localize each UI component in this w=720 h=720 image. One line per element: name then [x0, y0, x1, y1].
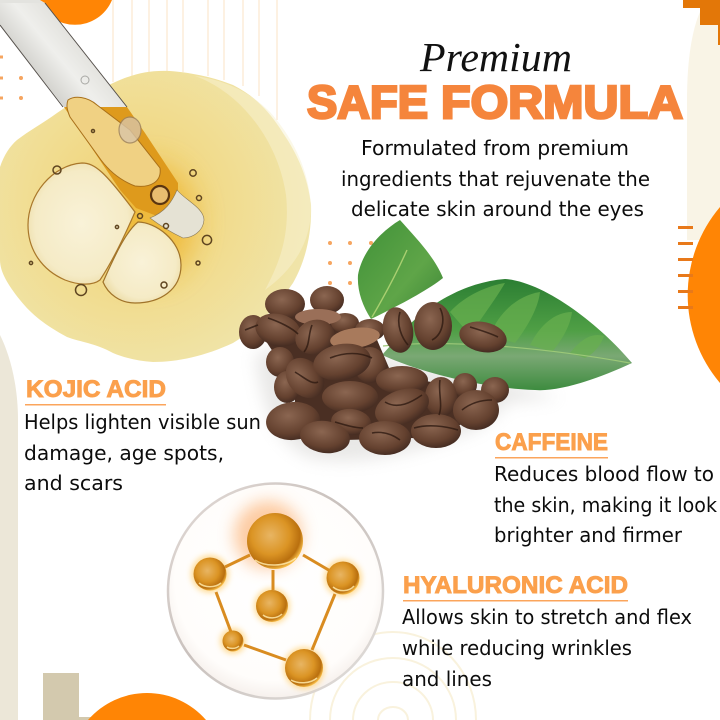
dropper dark edge	[0, 3, 127, 107]
beans	[239, 286, 510, 456]
bean shadow	[255, 340, 560, 461]
large bubble	[28, 163, 135, 284]
heading: Hyaluronic Acid: HYALURONIC ACID	[403, 572, 628, 599]
oil serum illustration	[0, 0, 311, 362]
small bubble	[103, 222, 181, 303]
text: Caffeine: Reduces blood flow to	[494, 462, 714, 486]
amber glow	[104, 164, 196, 280]
title: SAFE FORMULA	[307, 76, 683, 128]
bottom concentric rings	[310, 632, 476, 720]
left cream column	[0, 335, 18, 720]
heading: Caffeine: CAFFEINE	[495, 429, 608, 456]
text: Kojic Acid	[24, 410, 261, 495]
molecule illustration	[168, 484, 383, 698]
text: Hyaluronic Acid	[402, 605, 692, 691]
text: Kojic Acid: Helps lighten visible sun	[24, 410, 261, 434]
intro text: Formulated from premium	[361, 136, 629, 160]
glass dish	[168, 484, 383, 698]
title: Premium: Premium	[419, 34, 572, 80]
bottom orange circle	[88, 693, 206, 720]
leaf stripes	[450, 283, 604, 358]
puddle highlight	[195, 76, 311, 290]
air bubble rings	[29, 130, 212, 296]
text: Hyaluronic Acid: while reducing wrinkles	[402, 636, 632, 660]
text: Kojic Acid: and scars	[24, 471, 123, 495]
atoms	[194, 513, 360, 687]
top right stepped orange block	[683, 0, 720, 45]
dark bean underlay	[262, 312, 485, 440]
amber oil in dropper	[64, 107, 178, 224]
middle dot grid	[328, 241, 373, 285]
glass dropper tube	[0, 3, 127, 107]
lower leaf	[382, 279, 632, 390]
right tick marks	[678, 226, 693, 309]
heading: Kojic Acid: KOJIC ACID	[26, 376, 166, 403]
oil puddle	[0, 71, 311, 362]
upper leaf	[358, 220, 443, 319]
text: Caffeine	[494, 462, 717, 547]
oil pill inside dropper	[67, 97, 160, 186]
bean creases	[245, 308, 498, 440]
title: SAFE FORMULA: SAFE	[307, 76, 428, 128]
text: Hyaluronic Acid: and lines	[402, 667, 492, 691]
coffee beans and leaves	[239, 220, 632, 461]
intro text: delicate skin around the eyes	[351, 197, 644, 221]
atom highlights	[199, 558, 354, 683]
bonds	[216, 555, 335, 660]
bottom left beige block	[43, 673, 115, 720]
underline: Caffeine	[495, 457, 608, 458]
leaf midrib	[383, 344, 630, 363]
intro text	[341, 136, 650, 221]
underline: Kojic Acid	[25, 404, 166, 406]
dropper tip	[150, 190, 204, 238]
underline: Hyaluronic Acid	[403, 600, 628, 602]
swirl in dropper	[119, 117, 141, 143]
right cream column	[687, 12, 720, 240]
right orange circle	[688, 207, 720, 383]
top orange circle	[38, 0, 112, 25]
text: Hyaluronic Acid: Allows skin to stretch and flex	[402, 605, 692, 629]
glow	[234, 501, 302, 569]
intro text: ingredients that rejuvenate the	[341, 167, 650, 191]
text: Caffeine: brighter and firmer	[494, 523, 683, 547]
left dot grid	[0, 56, 23, 100]
decorative vertical stripes	[113, 0, 277, 120]
text: Kojic Acid: damage, age spots,	[24, 441, 224, 465]
title: SAFE FORMULA: FORMULA	[441, 76, 683, 128]
